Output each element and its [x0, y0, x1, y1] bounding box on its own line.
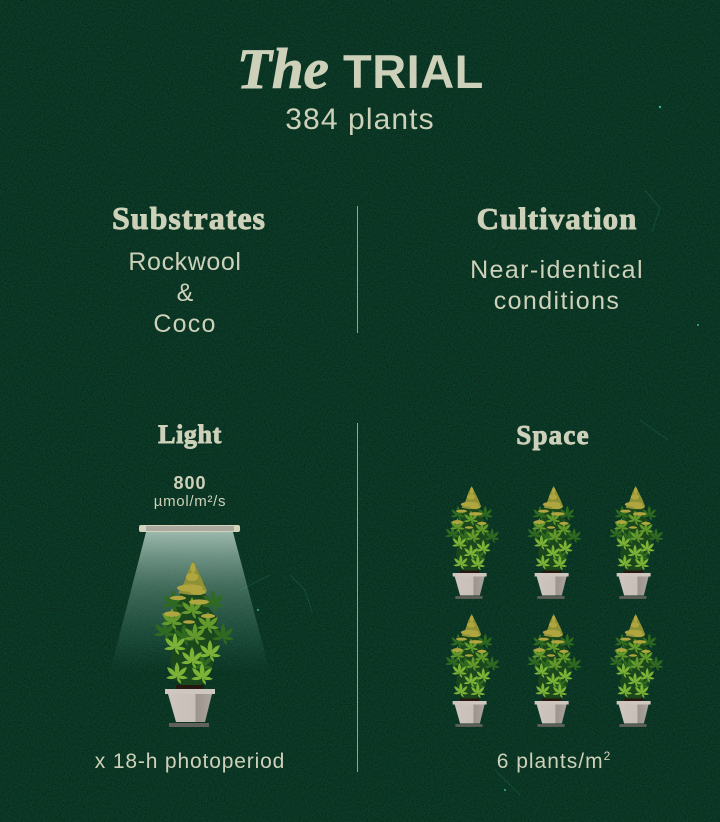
text: substrates: & — [177, 279, 193, 307]
heading: cultivation: Cultivation — [477, 201, 637, 236]
heading: space: Space — [516, 420, 590, 450]
text: cultivation — [470, 256, 644, 315]
title — [237, 38, 484, 101]
title: TRIAL — [343, 45, 484, 98]
divider: lower — [357, 423, 358, 772]
small plants grid — [445, 486, 664, 727]
caption: photoperiod: x 18-h photoperiod — [95, 750, 285, 773]
label: 800: 800 — [173, 473, 207, 493]
text: substrates: Rockwool — [128, 248, 242, 276]
divider: upper — [357, 206, 358, 333]
title: The — [237, 38, 329, 101]
large plant in pot — [154, 561, 234, 727]
lamp fixture — [139, 525, 240, 532]
lamp light beam — [110, 532, 270, 672]
text: cultivation: conditions — [494, 287, 620, 315]
text: cultivation: Near-identical — [470, 256, 644, 284]
text: substrates — [128, 248, 242, 338]
heading: substrates: Substrates — [112, 200, 266, 236]
caption: density: 6 plants/m2 — [497, 749, 611, 773]
subtitle: 384 plants — [285, 103, 435, 136]
label: unit: µmol/m²/s — [154, 493, 226, 510]
text: substrates: Coco — [153, 310, 217, 338]
heading: light: Light — [158, 420, 222, 449]
